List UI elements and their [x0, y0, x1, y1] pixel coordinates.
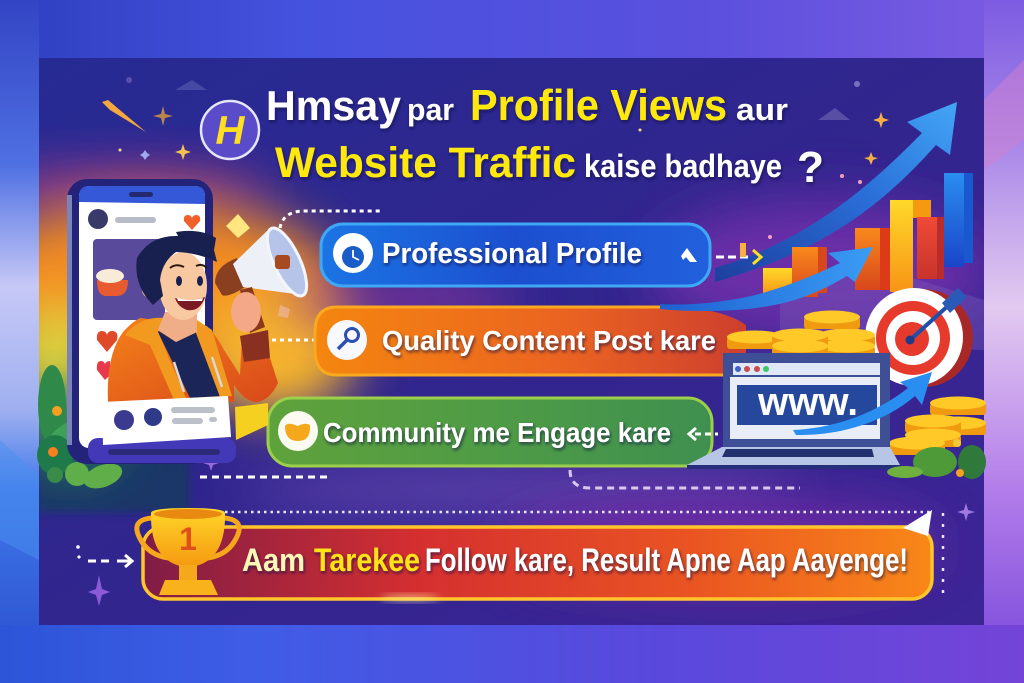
photo: [93, 239, 165, 320]
sparkles and comet: [88, 77, 975, 606]
icon: clock gauge: [333, 233, 373, 273]
icon: trophy: 1: [179, 521, 197, 557]
banner: Aam: [242, 542, 305, 578]
laptop: www.: [757, 380, 858, 424]
pill: Quality Content Post kare: Quality Content Post kare: [382, 325, 716, 356]
bar chart: [763, 173, 973, 297]
pill: Community me Engage kare: Community me Engage kare: [323, 417, 671, 448]
logo badge H: [201, 101, 259, 159]
plant left: [37, 365, 126, 493]
arrow: www growth: [793, 372, 932, 435]
diamond confetti: [226, 214, 290, 318]
pill: Community me Engage kare: [268, 398, 718, 466]
logo badge H: H: [216, 109, 246, 153]
icon: trophy: [137, 508, 239, 595]
laptop: [687, 353, 932, 469]
title: [266, 81, 824, 192]
icon: heart: [184, 215, 200, 230]
title: kaise badhaye: [584, 148, 782, 184]
banner: Follow kare, Result Apne Aap Aayenge!: [425, 542, 908, 578]
title: Profile Views: [470, 81, 727, 130]
eyebrows: [170, 265, 207, 268]
big growth arrow: [715, 102, 957, 282]
phone: [67, 179, 236, 464]
icon: magnifier: [327, 320, 367, 360]
t-shirt: [157, 330, 220, 398]
target: [865, 288, 973, 387]
pill: Professional Profile: [321, 224, 710, 286]
pill: Quality Content Post kare: [315, 307, 746, 375]
neck and face: [158, 312, 197, 342]
banner arrow left: [76, 545, 132, 567]
banner: [143, 510, 932, 600]
handle and hand: [240, 287, 265, 333]
title: Hmsay: [266, 82, 402, 129]
person with megaphone: [108, 223, 314, 402]
title: aur: [736, 92, 788, 127]
hood collar: [125, 318, 232, 400]
title: Website Traffic: [275, 139, 576, 187]
drawstrings: [174, 357, 222, 392]
eyes and smile: [176, 276, 182, 286]
icon: folder: [278, 411, 318, 451]
title: ?: [797, 143, 824, 192]
dotted connectors: [200, 211, 943, 600]
plant right: [887, 439, 986, 479]
title: par: [407, 92, 454, 127]
second growth arrow: [660, 247, 873, 311]
pill: Professional Profile: Professional Profile: [382, 238, 642, 270]
banner: Tarekee: [314, 542, 420, 578]
coins: [727, 310, 986, 455]
hoodie: [108, 318, 278, 402]
hair: [136, 231, 217, 305]
hearts: [97, 331, 117, 352]
yellow ribbon: [235, 403, 268, 440]
avatar: [88, 209, 108, 229]
arrow: dashed yellow to chart: [716, 243, 761, 264]
megaphone: [215, 258, 245, 296]
profile card: [102, 396, 231, 445]
